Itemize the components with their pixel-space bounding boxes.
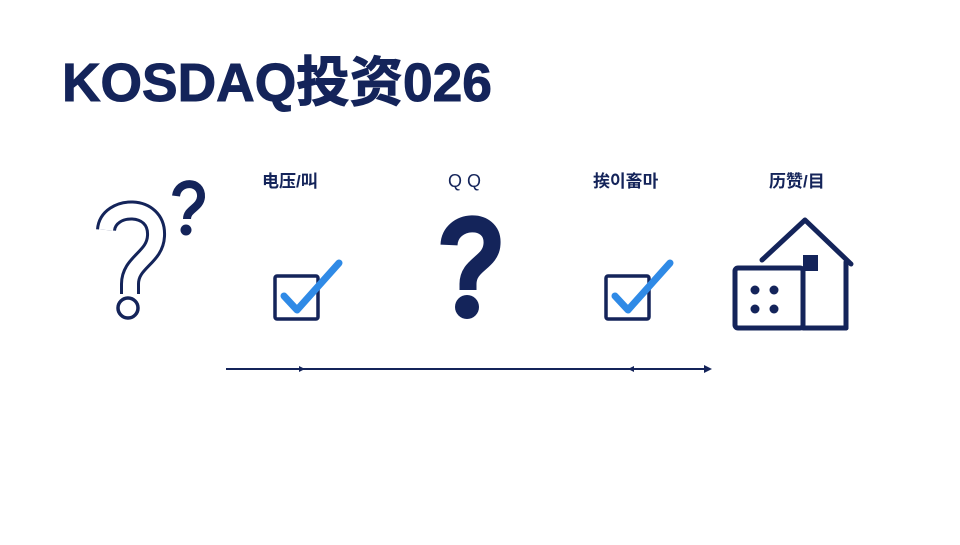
icon: checkbox 2 [606, 263, 670, 319]
label 4: 历赞/目 [769, 172, 825, 191]
label 3: 挨이畜마 [593, 172, 659, 191]
icon: house [735, 220, 851, 328]
icon: checkbox 1 [275, 263, 339, 319]
arrow: timeline [226, 365, 712, 373]
icon: big question mark [449, 224, 492, 319]
icon: outline question mark [106, 210, 156, 318]
label 2: Q Q [448, 171, 481, 191]
icon: small question mark [176, 184, 201, 236]
label 1: 电压/叫 [262, 172, 318, 191]
title: KOSDAQ投资026 [62, 53, 492, 113]
